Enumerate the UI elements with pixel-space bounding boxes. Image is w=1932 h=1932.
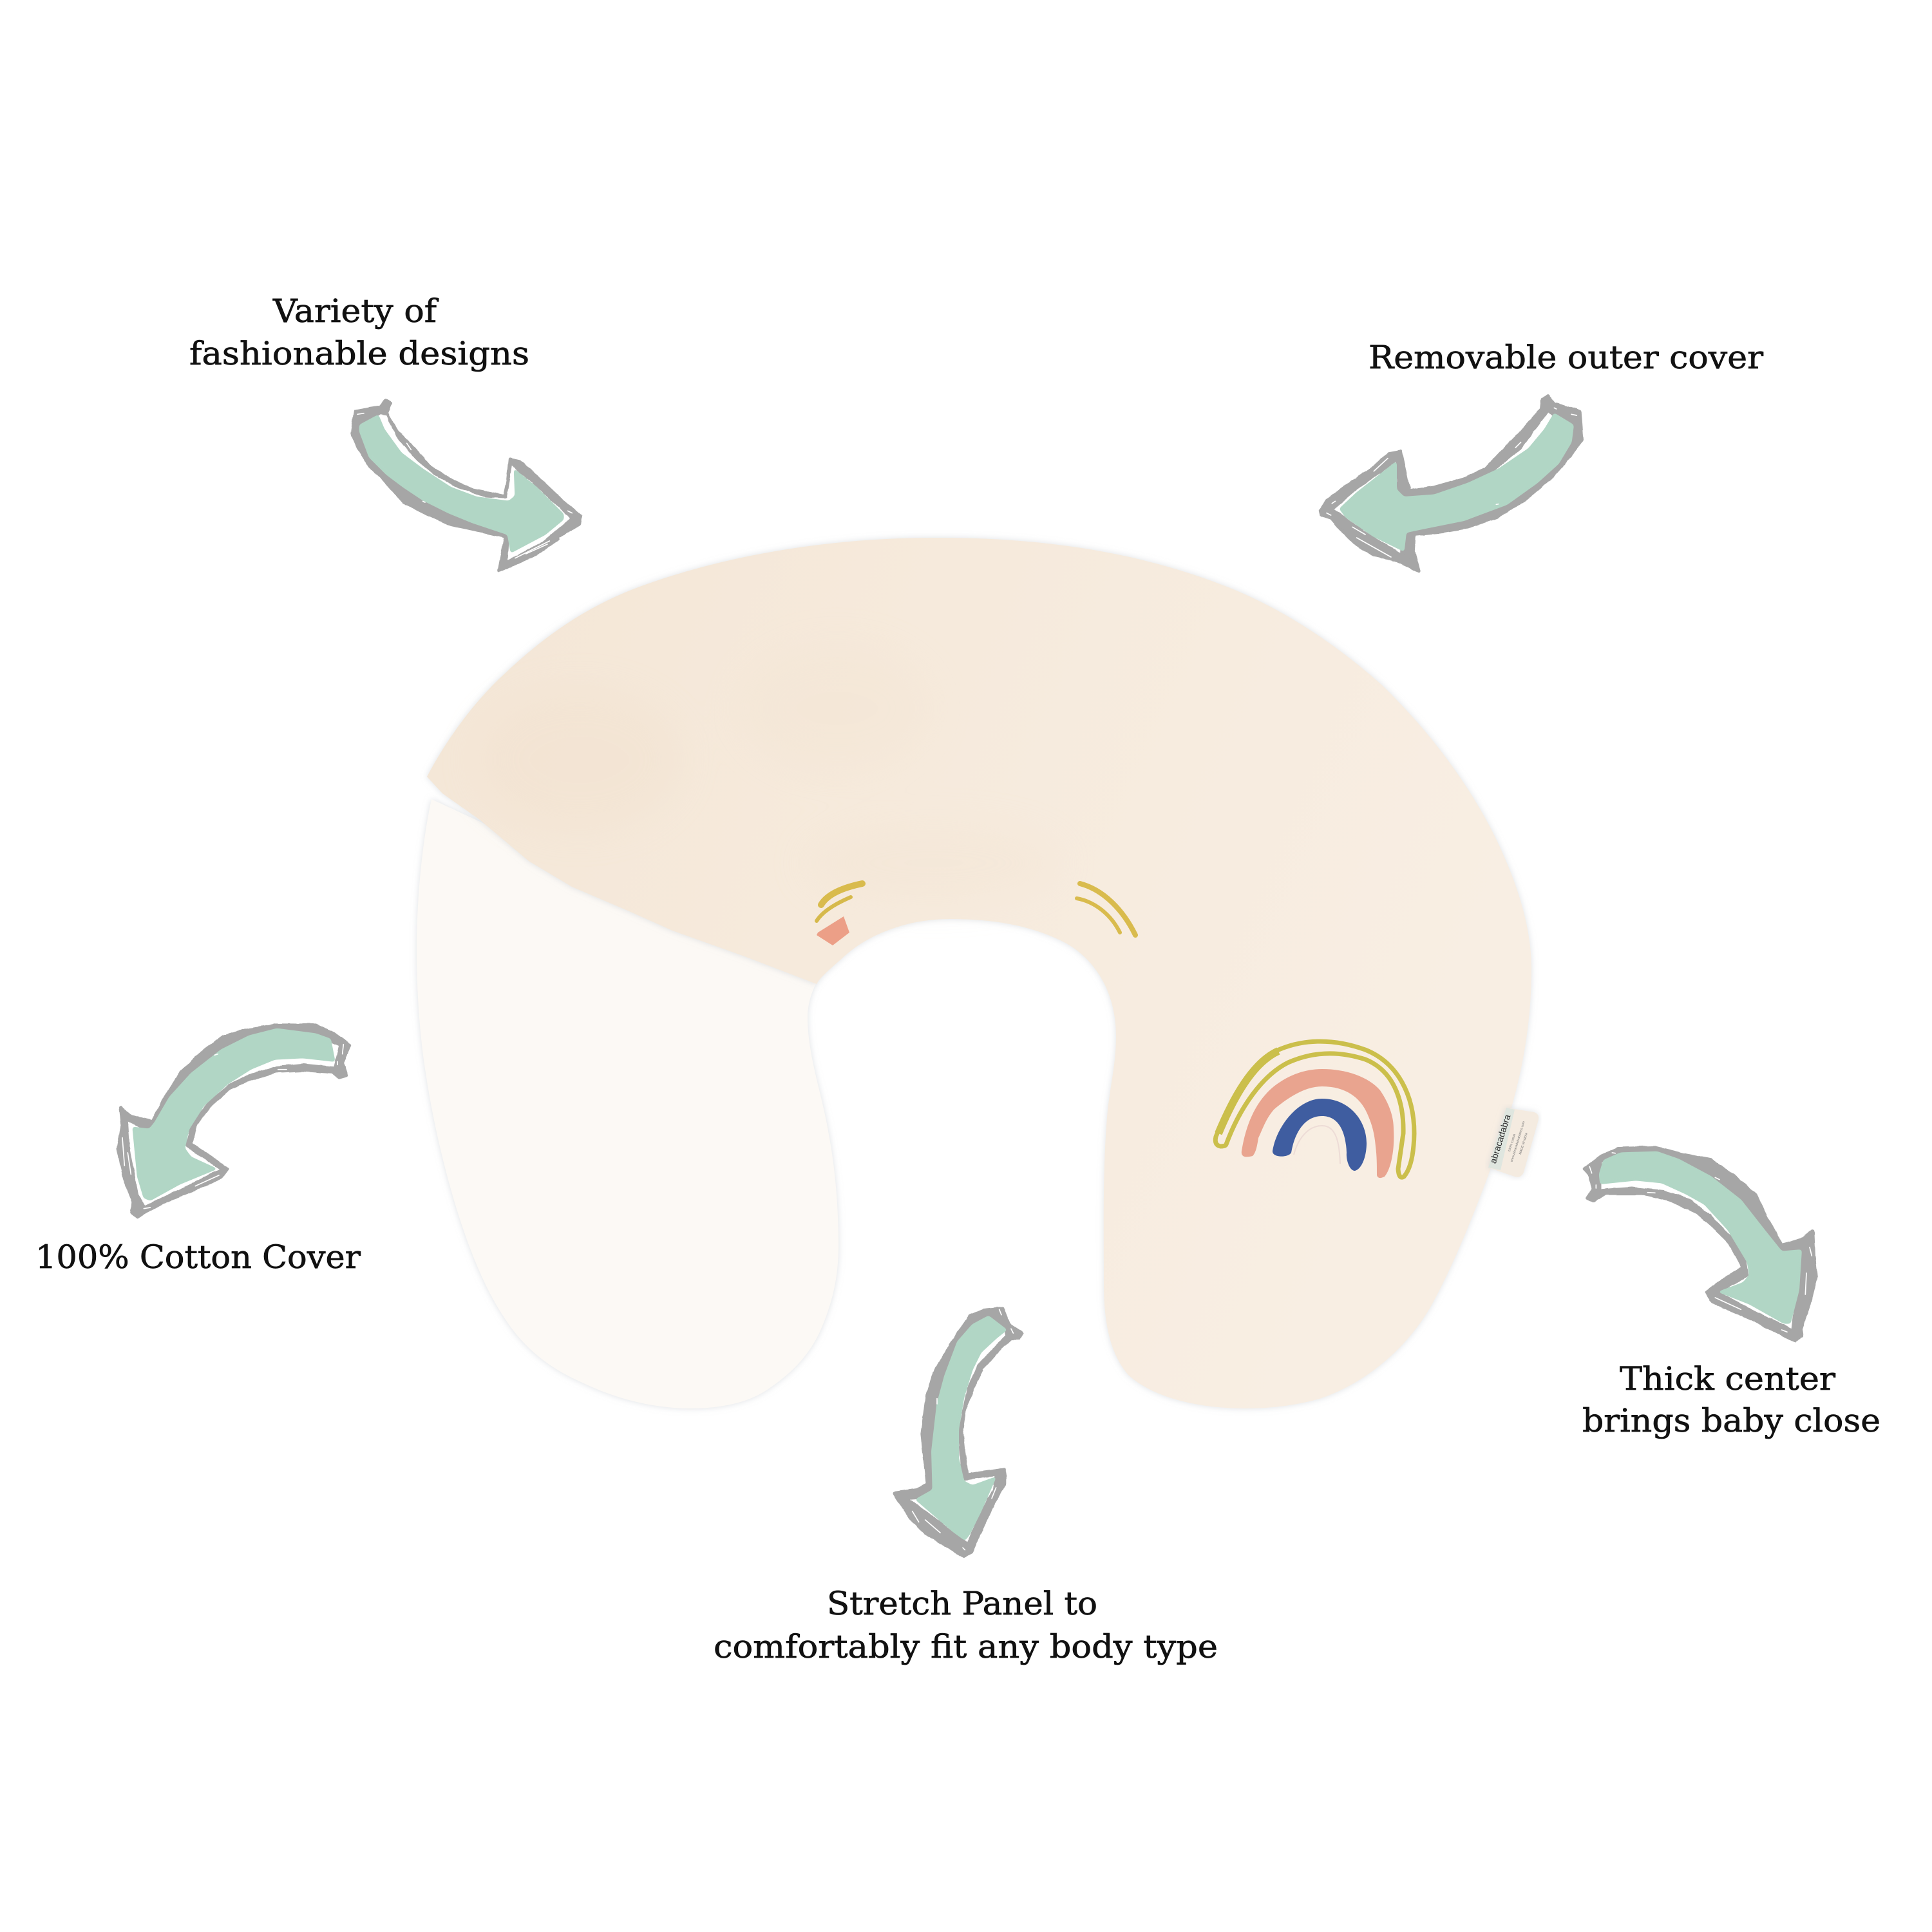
arrow fill — [359, 415, 564, 553]
fabric brand tag: 100% Cotton — [1508, 1133, 1517, 1152]
label: variety of fashionable designs: Variety of — [272, 292, 439, 330]
pillow white stretch panel — [417, 799, 838, 1408]
label: stretch panel — [714, 1585, 1218, 1665]
arrow fill — [916, 1316, 1007, 1540]
arrow outline — [1320, 396, 1582, 571]
label: stretch panel: Stretch Panel to — [827, 1585, 1097, 1622]
fabric brand tag: MADE IN INDIA — [1519, 1132, 1529, 1155]
rainbow faint inner arch — [1294, 1126, 1340, 1164]
nursing pillow — [417, 538, 1539, 1408]
fabric brand tag — [1488, 1108, 1539, 1177]
fabric brand tag: abracadabra — [1488, 1113, 1512, 1164]
arrow outline — [118, 1025, 350, 1217]
arrow fill — [1340, 413, 1573, 551]
arrow: removable cover — [1320, 396, 1582, 571]
arrow: cotton cover — [118, 1025, 350, 1217]
pillow beige outer cover — [427, 538, 1531, 1408]
arrow fill — [1599, 1151, 1801, 1323]
embroidery: right arch fragments — [1077, 884, 1135, 935]
embroidery: left arch fragments — [817, 884, 862, 945]
arrow: thick center — [1584, 1148, 1816, 1341]
arrow outline — [1584, 1148, 1816, 1341]
label: thick center: Thick center — [1620, 1360, 1835, 1397]
label: thick center: brings baby close — [1582, 1402, 1880, 1439]
label: variety of fashionable designs: fashionable designs — [189, 335, 529, 372]
rainbow blue band — [1273, 1099, 1367, 1171]
label: variety of fashionable designs — [189, 292, 529, 372]
fabric mottling — [477, 644, 1063, 902]
label: stretch panel: comfortably fit any body type — [714, 1628, 1218, 1665]
label: cotton cover: 100% Cotton Cover — [35, 1238, 361, 1276]
rainbow pink band — [1242, 1069, 1394, 1178]
fabric brand tag: www.abracadabrababies.com — [1510, 1121, 1526, 1162]
arrow outline — [894, 1309, 1022, 1557]
arrow: stretch panel — [894, 1309, 1022, 1557]
label: thick center — [1582, 1360, 1880, 1439]
rainbow embroidery — [1215, 1041, 1414, 1178]
arrow: fashionable designs — [352, 401, 581, 571]
arrow fill — [133, 1028, 335, 1200]
label: removable outer cover: Removable outer cover — [1368, 339, 1763, 376]
rainbow yellow loop — [1215, 1041, 1414, 1177]
arrow outline — [352, 401, 581, 571]
